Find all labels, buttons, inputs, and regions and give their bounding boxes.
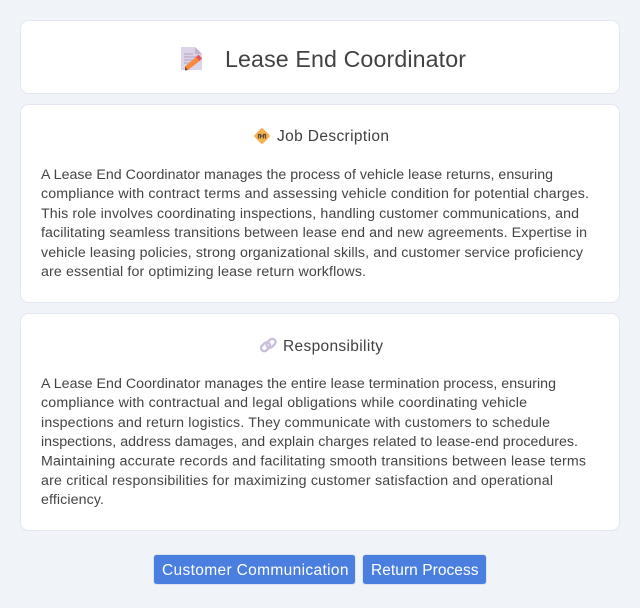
responsibility text: are critical responsibilities for maximizing customer satisfaction and operational <box>41 473 553 489</box>
heading: responsibility: Responsibility <box>283 338 383 355</box>
job description text: are essential for optimizing lease return workflows. <box>41 264 366 280</box>
responsibility text: efficiency. <box>41 492 104 508</box>
job description text: compliance with contract terms and assessing vehicle condition for potential charges. <box>41 186 589 202</box>
panel: job description <box>20 104 620 302</box>
tag: return process: Return Process <box>371 562 479 579</box>
job description text: This role involves coordinating inspections, handling customer communications, and <box>41 206 579 222</box>
icon: chain link <box>260 337 277 353</box>
icon: road sign <box>254 128 270 144</box>
job description text: vehicle leasing policies, strong organizational skills, and customer service proficiency <box>41 245 584 261</box>
tag: customer communication <box>154 554 356 584</box>
responsibility text: Maintaining accurate records and facilitating smooth transitions between lease terms <box>41 454 586 470</box>
responsibility text: A Lease End Coordinator manages the entire lease termination process, ensuring <box>41 376 556 392</box>
panel: responsibility <box>20 314 620 530</box>
job description text: facilitating seamless transitions between lease end and new agreements. Expertise in <box>41 225 587 241</box>
job description text: A Lease End Coordinator manages the process of vehicle lease returns, ensuring <box>41 167 553 183</box>
responsibility text: inspections and return logistics. They communicate with customers to schedule <box>41 415 550 431</box>
job description text <box>41 167 589 280</box>
responsibility text: compliance with contractual and legal obligations while coordinating vehicle <box>41 395 527 411</box>
tag: customer communication: Customer Communication <box>162 562 348 579</box>
icon: document with pencil <box>181 47 202 70</box>
tag: return process <box>362 554 486 584</box>
heading: job description: Job Description <box>277 128 389 145</box>
title text: Lease End Coordinator <box>225 46 466 72</box>
panel: title <box>20 20 620 94</box>
responsibility text: inspections, address damages, and explain charges related to lease-end procedures. <box>41 434 578 450</box>
responsibility text <box>41 376 586 508</box>
